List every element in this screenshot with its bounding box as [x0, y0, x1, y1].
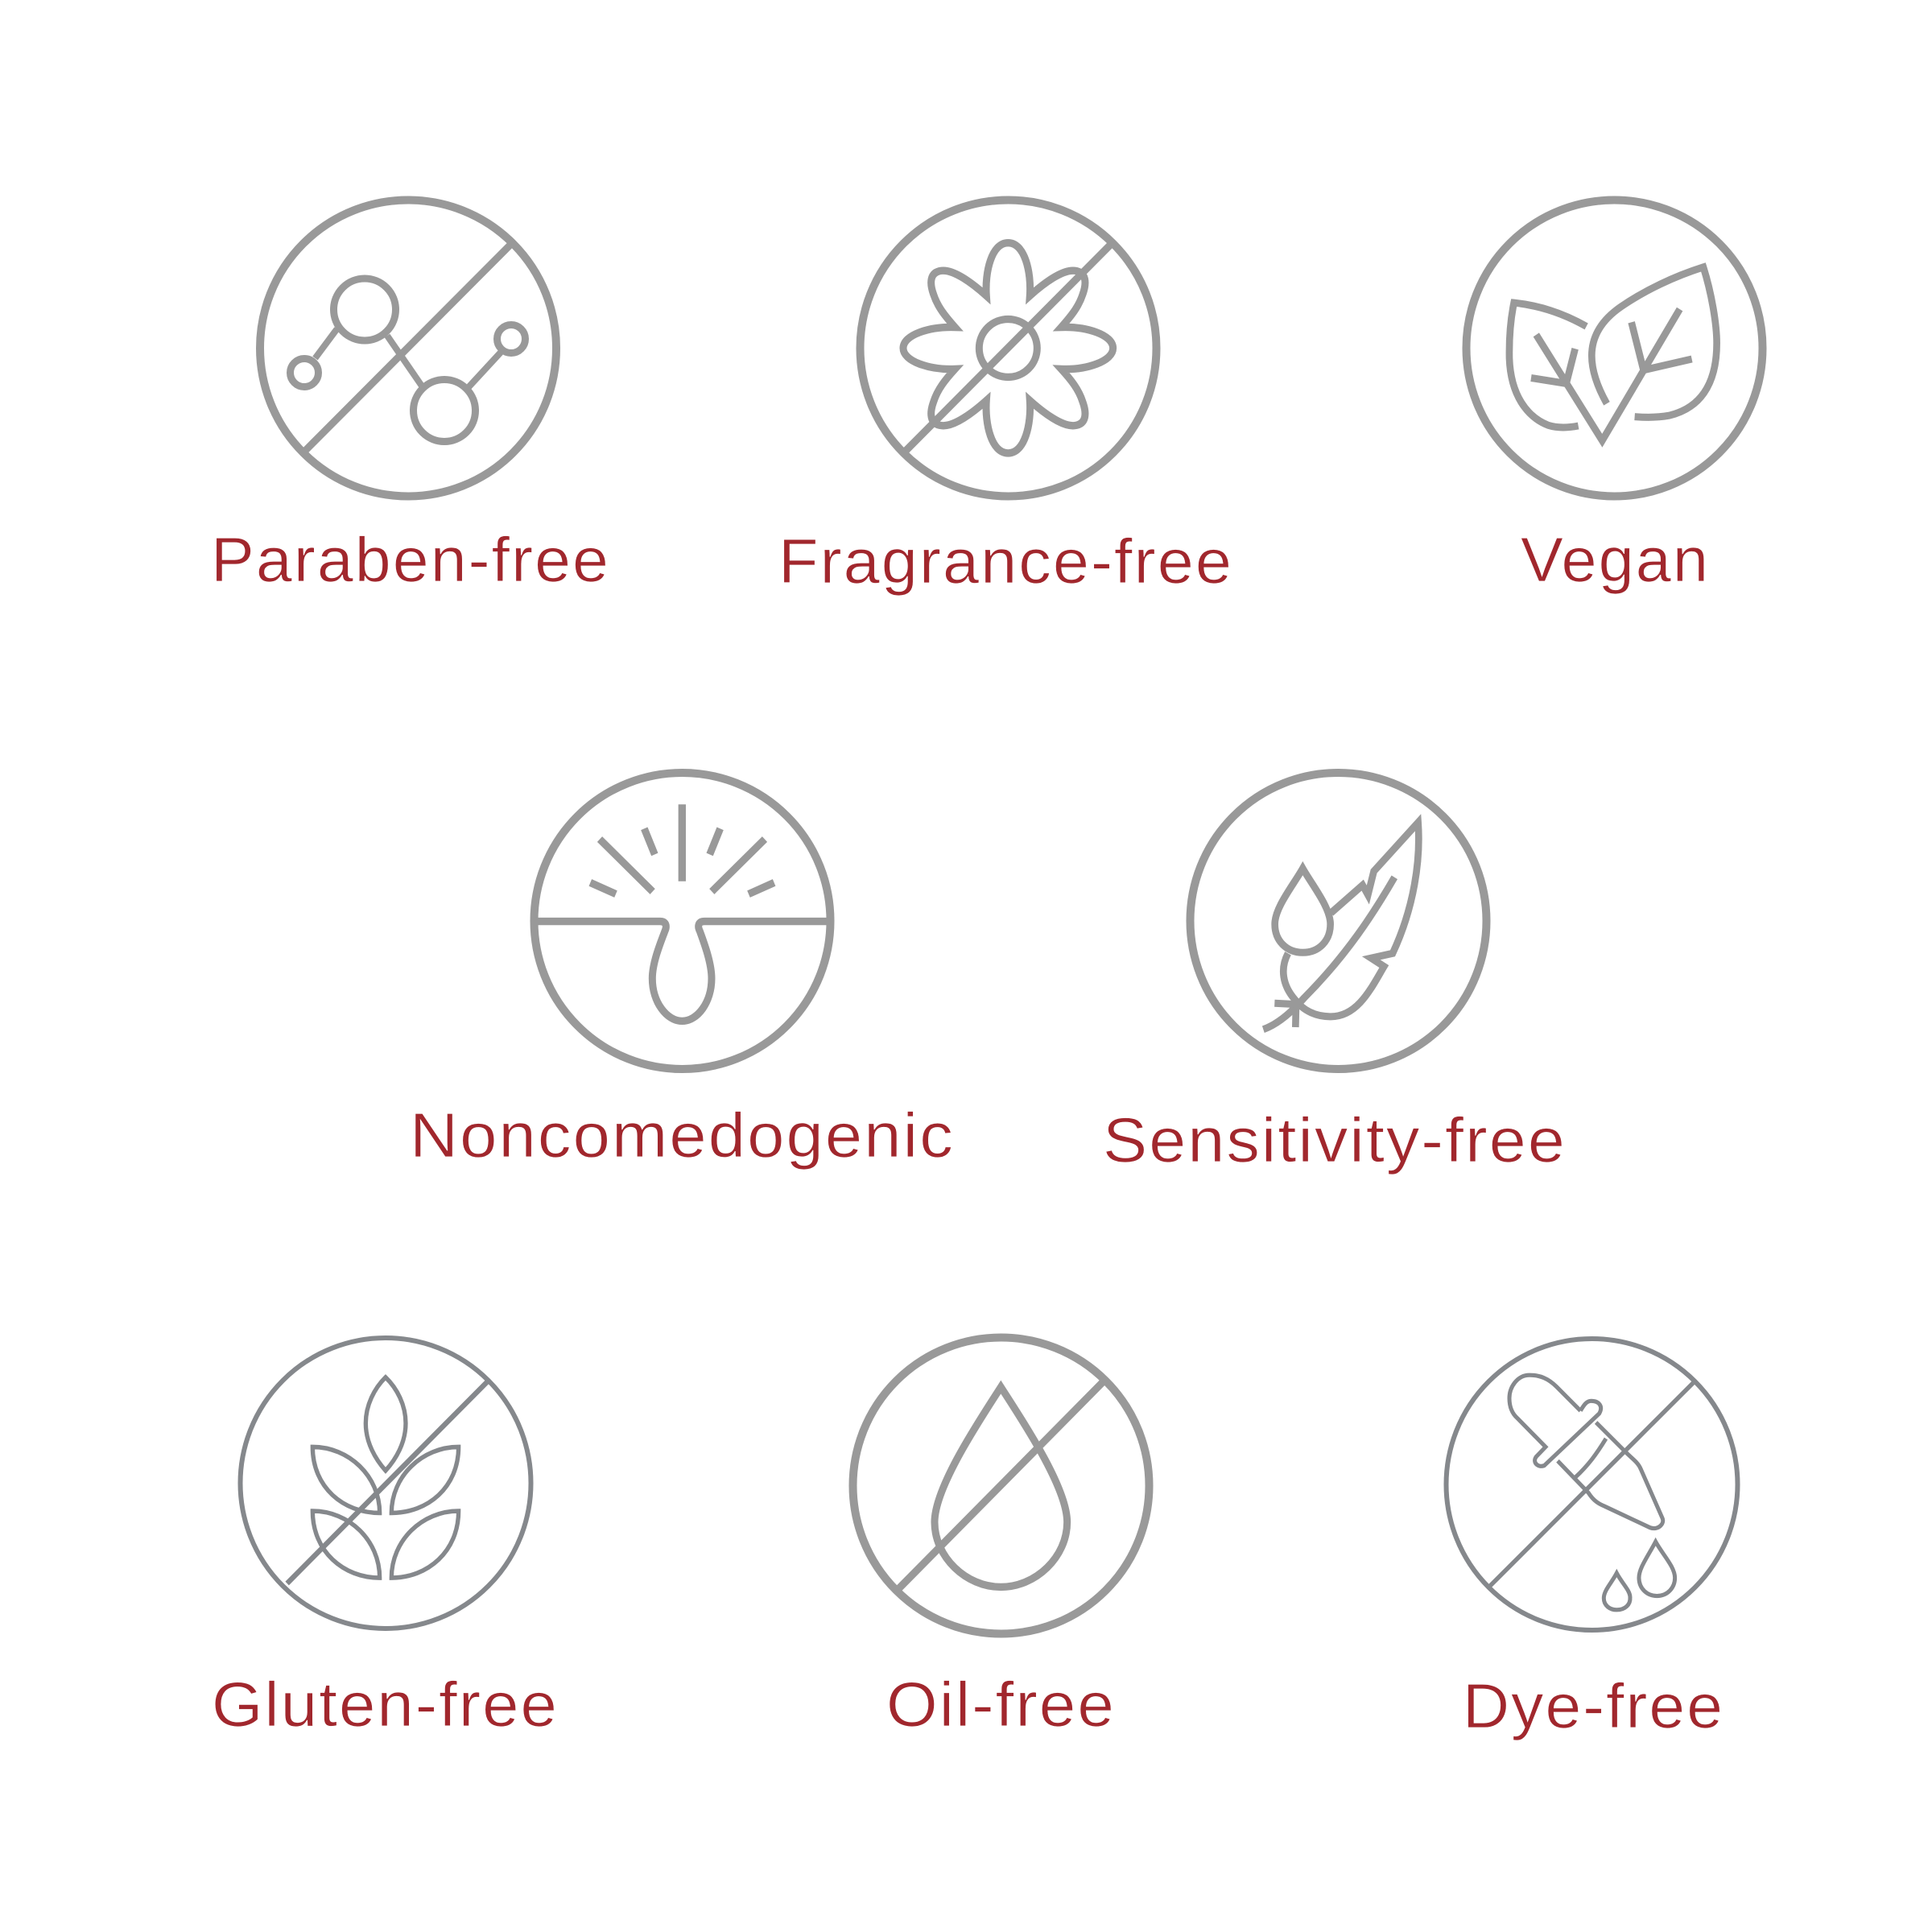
icon: feather and drop — [1190, 773, 1486, 1069]
panel: paraben-free — [211, 200, 610, 595]
label: dye-free: Dye-free — [1463, 1670, 1724, 1741]
panel: vegan — [1467, 200, 1763, 595]
label: gluten-free: Gluten-free — [212, 1669, 559, 1740]
panel: dye-free — [1446, 1339, 1737, 1741]
icon: pore with rays — [535, 773, 831, 1069]
panel: noncomedogenic — [410, 773, 955, 1170]
panel: oil-free — [853, 1338, 1150, 1740]
label: fragrance-free: Fragrance-free — [778, 526, 1233, 597]
label: vegan: Vegan — [1521, 524, 1710, 595]
icon: crossed-out dropper — [1446, 1339, 1737, 1630]
icon: crossed-out flower — [860, 200, 1156, 496]
icon: crossed-out oil drop — [853, 1338, 1150, 1634]
panel: sensitivity-free — [1103, 773, 1567, 1175]
icon: crossed-out wheat — [240, 1338, 531, 1629]
panel: gluten-free — [212, 1338, 559, 1740]
label: noncomedogenic: Noncomedogenic — [410, 1100, 955, 1170]
label: oil-free: Oil-free — [886, 1669, 1116, 1740]
panel: fragrance-free — [778, 200, 1233, 597]
label: sensitivity-free: Sensitivity-free — [1103, 1104, 1567, 1175]
label: paraben-free: Paraben-free — [211, 524, 610, 595]
icon: crossed-out molecule — [260, 200, 556, 496]
icon: two leaves — [1467, 200, 1763, 496]
